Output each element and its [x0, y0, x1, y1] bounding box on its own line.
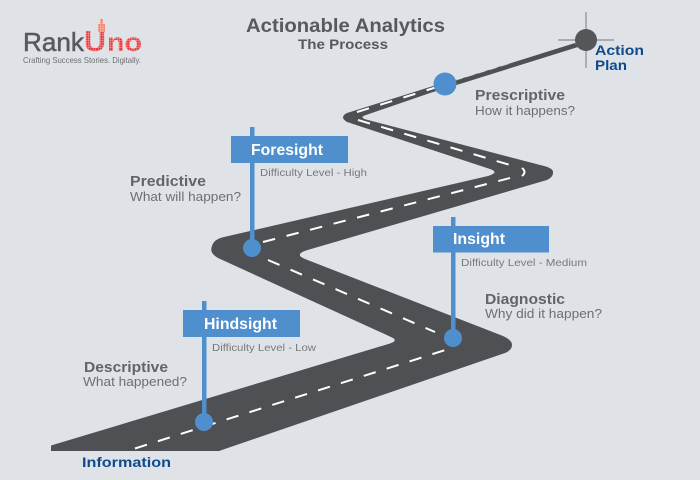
icon: action plan crosshair lines [558, 12, 614, 68]
signpost: foresight [231, 127, 367, 257]
label: predictive: Predictive [130, 174, 206, 190]
label: predictive: What will happen? [130, 189, 241, 204]
label: prescriptive [475, 88, 575, 118]
signpost: hindsight: Hindsight [204, 316, 277, 333]
title: The Process [298, 36, 388, 52]
label: predictive [130, 174, 241, 204]
title: Actionable Analytics [246, 16, 445, 37]
label: prescriptive: Prescriptive [475, 88, 565, 104]
logo: RankUno: no [107, 27, 142, 57]
label: descriptive: Descriptive [84, 360, 168, 376]
label: descriptive: What happened? [83, 374, 187, 389]
signpost: insight: Insight [453, 231, 505, 248]
signpost: hindsight [183, 301, 316, 431]
label: prescriptive: How it happens? [475, 103, 575, 118]
label: descriptive [83, 360, 187, 389]
logo: RankUno [23, 19, 142, 65]
label: diagnostic: Why did it happen? [485, 306, 602, 321]
label: action plan [595, 42, 644, 73]
label: diagnostic: Diagnostic [485, 292, 565, 308]
signpost: foresight: Foresight [251, 142, 323, 159]
road centre dashes [135, 64, 524, 448]
marker: prescriptive [434, 72, 456, 96]
signpost: hindsight: Difficulty Level - Low [212, 342, 316, 354]
signpost: foresight: Difficulty Level - High [260, 167, 367, 179]
logo: RankUno: U [84, 26, 106, 58]
label: action plan: Action [595, 42, 644, 58]
signpost: insight: Difficulty Level - Medium [461, 257, 587, 269]
label: information: Information [82, 454, 171, 470]
label: diagnostic [485, 292, 602, 321]
logo: RankUno: Crafting Success Stories. Digitally. [23, 55, 141, 65]
label: action plan: Plan [595, 57, 627, 73]
logo: RankUno: Rank [23, 27, 85, 57]
title [246, 16, 445, 52]
marker: action plan [575, 29, 597, 51]
signpost: insight [433, 217, 587, 347]
winding road [51, 43, 578, 451]
